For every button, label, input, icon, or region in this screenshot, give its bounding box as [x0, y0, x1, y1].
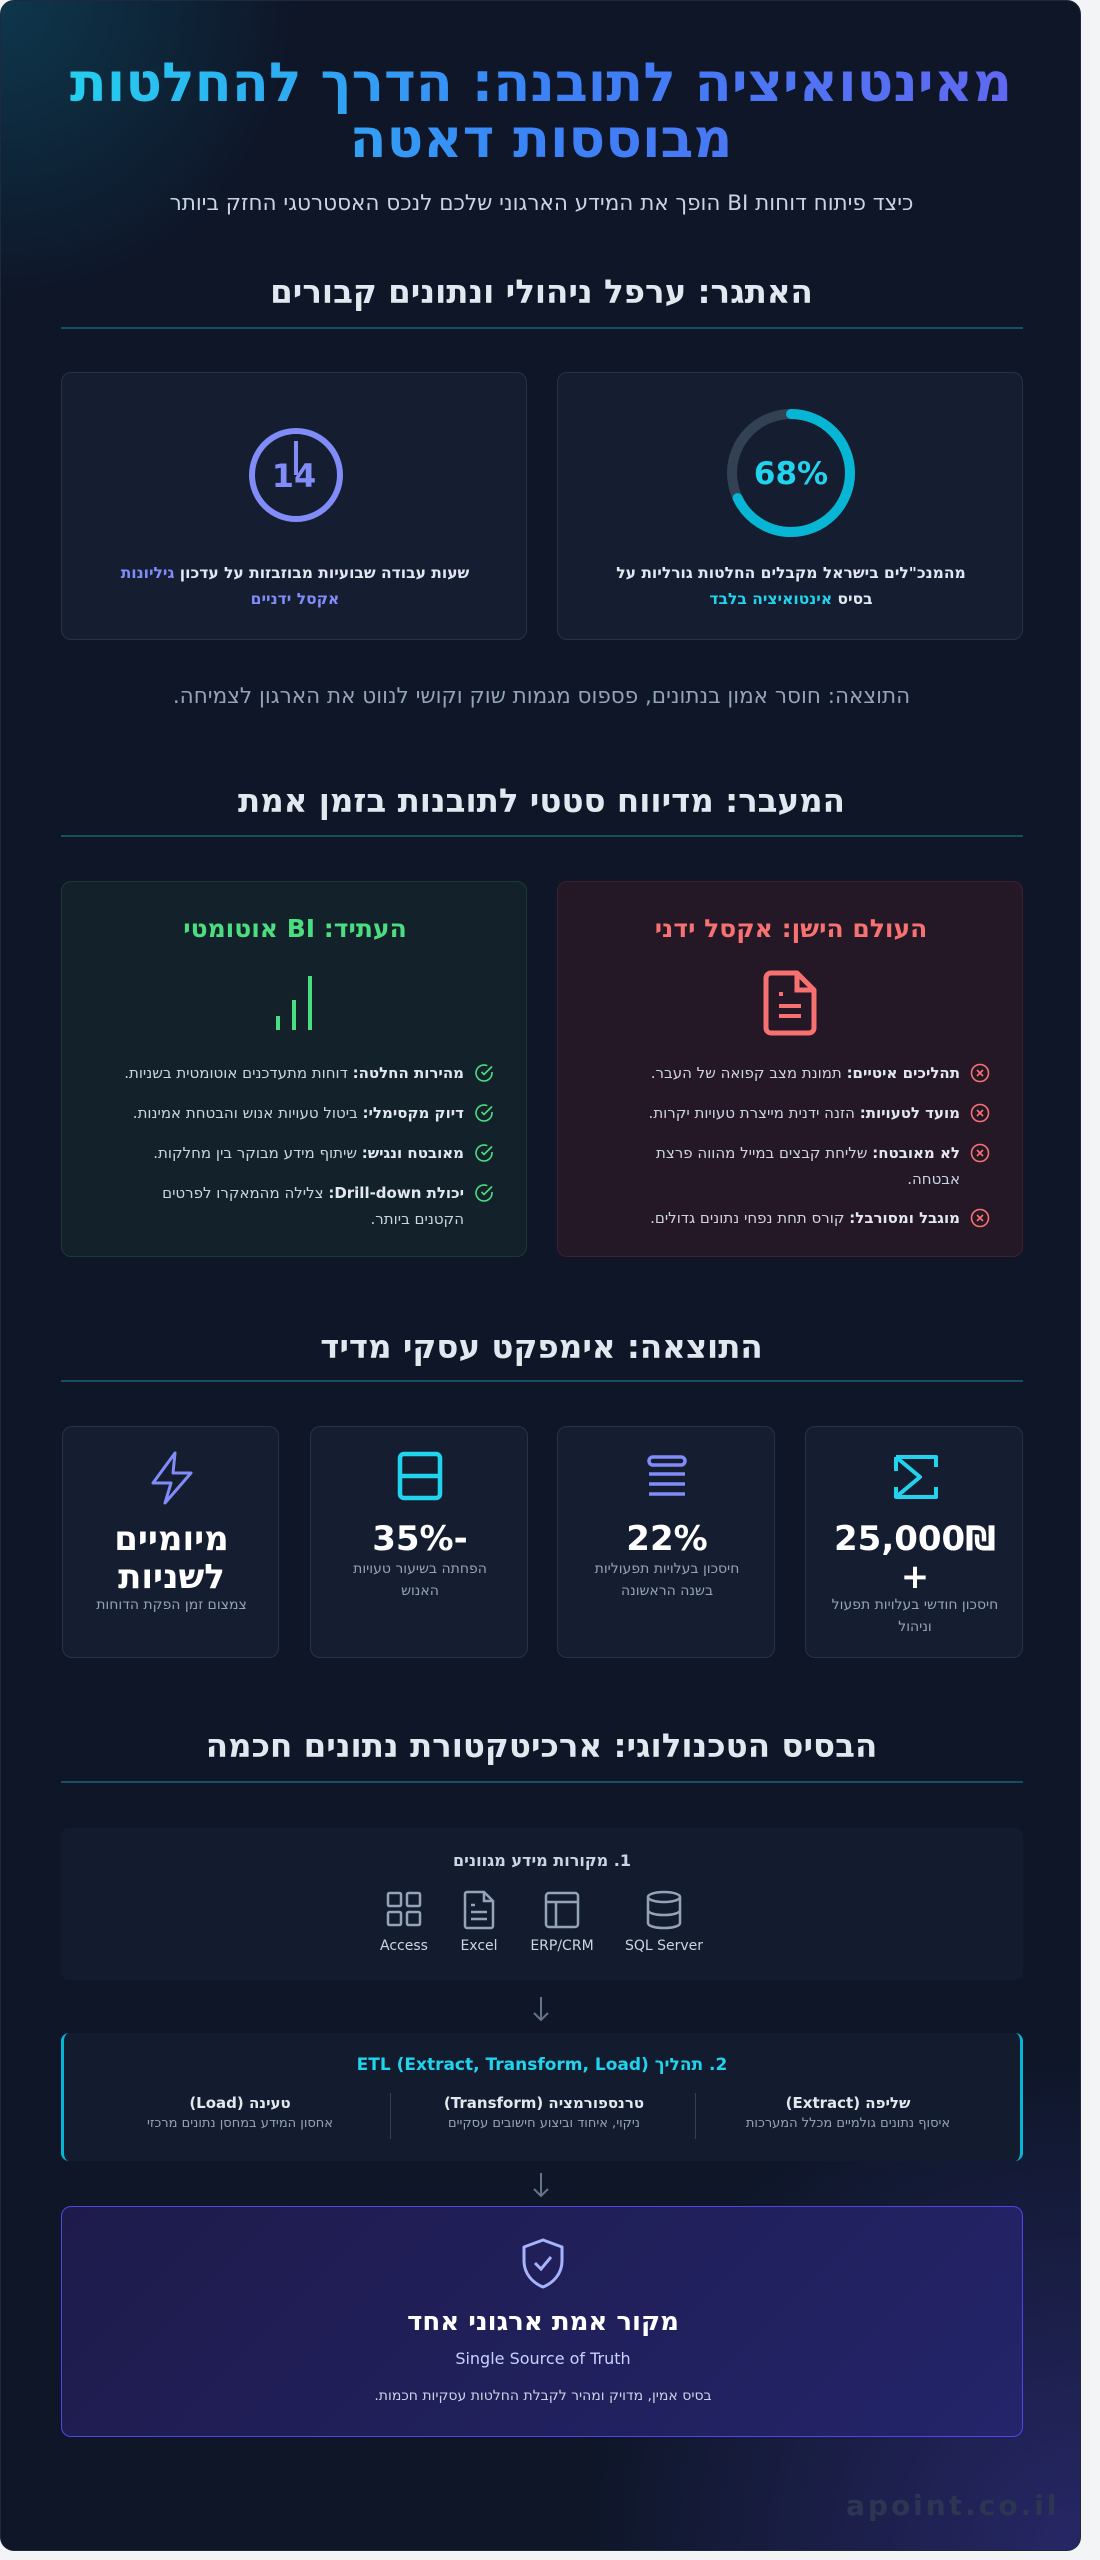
text: 68% description: מהמנכ"לים בישראל מקבלים החלטות גורליות על בסיס אינטואיציה בלבד	[616, 564, 966, 608]
step: extract: איסוף נתונים גולמיים מכלל המערכות	[746, 2116, 950, 2131]
heading: transition: המעבר: מדיווח סטטי לתובנות בזמן אמת	[238, 782, 845, 820]
donut chart 68%: 68%	[754, 456, 828, 492]
panel: future BI	[61, 881, 527, 1257]
step: transform	[444, 2094, 644, 2131]
step: load: אחסון המידע במחסן נתונים מרכזי	[147, 2116, 333, 2131]
icon: split box	[398, 1452, 442, 1500]
step: transform: ניקוי, איחוד וביצוע חישובים עסקיים	[448, 2116, 640, 2131]
title: מאינטואיציה לתובנה: הדרך להחלטות מבוססות דאטה	[70, 51, 1012, 170]
icon: stack	[647, 1455, 687, 1496]
arrow: ETL to truth	[533, 2173, 549, 2198]
heading: impact: התוצאה: אימפקט עסקי מדיד	[320, 1328, 763, 1366]
icon: clock 14	[249, 428, 343, 522]
subtitle: כיצד פיתוח דוחות BI הופך את המידע הארגוני שלכם לנכס האסטרטגי החזק ביותר	[170, 191, 913, 216]
number: -35%	[372, 1519, 468, 1559]
icon: SQL Server	[625, 1890, 703, 1954]
heading: future BI: העתיד: BI אוטומטי	[183, 914, 407, 943]
panel: data sources	[61, 1828, 1023, 1980]
text: 14 hours description: אקסל ידניים	[251, 590, 339, 608]
list: BI benefits: מהירות החלטה: דוחות מתעדכנים אוטומטית בשניות.	[124, 1064, 464, 1082]
icon: document	[764, 970, 816, 1036]
number: לשניות	[118, 1557, 225, 1597]
panel: 14 hours	[61, 372, 527, 640]
step: extract: שליפה (Extract)	[786, 2094, 910, 2112]
number: +	[901, 1557, 929, 1597]
icon: Excel: Excel	[460, 1938, 498, 1954]
list: BI benefits: דיוק מקסימלי: ביטול טעויות אנוש והבטחת אמינות.	[133, 1104, 464, 1122]
list: old world issues: מועד לטעויות: הזנה ידנית מייצרת טעויות יקרות.	[649, 1104, 960, 1122]
text: 14 hours description	[120, 564, 470, 608]
number: 25,000₪	[834, 1519, 996, 1559]
list: old world issues: לא מאובטח: שליחת קבצים במייל מהווה פרצת אבטחה.	[656, 1144, 960, 1188]
list: BI benefits: מאובטח ונגיש: שיתוף מידע מבוקר בין מחלקות.	[153, 1144, 464, 1162]
icon: clock 14: 14	[272, 457, 316, 495]
number	[114, 1519, 229, 1597]
icon: sigma	[894, 1455, 938, 1499]
heading: challenge: האתגר: ערפל ניהולי ונתונים קבורים	[270, 273, 813, 311]
icon: SQL Server: SQL Server	[625, 1938, 703, 1954]
subtitle: Single Source of Truth	[455, 2349, 631, 2368]
list: BI benefits	[124, 1064, 493, 1228]
list: BI benefits: יכולת Drill-down: צלילה מהמאקרו לפרטים הקטנים ביותר.	[162, 1184, 464, 1228]
desc: צמצום זמן הפקת הדוחות	[96, 1597, 247, 1613]
list: old world issues: מוגבל ומסורבל: קורס תחת נפחי נתונים גדולים.	[650, 1209, 960, 1227]
list: old world issues	[649, 1064, 990, 1228]
icon: shield	[522, 2238, 564, 2288]
text: result note: התוצאה: חוסר אמון בנתונים, פספוס מגמות שוק וקושי לנווט את הארגון לצמיחה.	[173, 684, 910, 709]
text: 14 hours description: שעות עבודה שבועיות מבוזבזות על עדכון גיליונות	[121, 564, 469, 582]
heading: sources: 1. מקורות מידע מגוונים	[453, 1851, 631, 1870]
stat card: 22%	[557, 1426, 775, 1658]
number	[834, 1519, 996, 1597]
arrow: sources to ETL	[533, 1997, 549, 2022]
watermark: apoint.co.il	[846, 2489, 1059, 2522]
number: מיומיים	[114, 1519, 229, 1559]
icon: ERP/CRM	[530, 1892, 594, 1954]
stat card: days to seconds	[62, 1426, 279, 1658]
heading: ETL: 2. תהליך ETL (Extract, Transform, Load)	[357, 2055, 727, 2075]
icon: Access: Access	[380, 1938, 428, 1954]
panel: ETL	[61, 2033, 1023, 2161]
heading: architecture: הבסיס הטכנולוגי: ארכיטקטורת נתונים חכמה	[206, 1727, 877, 1765]
step: transform: טרנספורמציה (Transform)	[444, 2094, 644, 2112]
icon: bar chart	[276, 976, 312, 1030]
heading: old world: העולם הישן: אקסל ידני	[655, 914, 927, 943]
number: 22%	[626, 1519, 708, 1559]
step: load	[147, 2094, 333, 2131]
panel: old world	[557, 881, 1023, 1257]
step: extract	[746, 2094, 950, 2131]
stat card: 25,000	[805, 1426, 1023, 1658]
icon: Excel	[460, 1890, 498, 1954]
panel: single source of truth	[61, 2206, 1023, 2437]
list: old world issues: תהליכים איטיים: תמונת מצב קפואה של העבר.	[651, 1064, 960, 1082]
desc: הפחתה בשיעור טעויות האנוש	[353, 1561, 487, 1599]
step: load: טעינה (Load)	[189, 2094, 291, 2112]
desc: חיסכון בעלויות תפעוליות בשנה הראשונה	[595, 1561, 739, 1599]
desc: בסיס אמין, מדויק ומהיר לקבלת החלטות עסקיות חכמות.	[374, 2388, 712, 2404]
heading: truth: מקור אמת ארגוני אחד	[407, 2307, 679, 2337]
icon: Access	[380, 1892, 428, 1954]
donut chart 68%	[727, 409, 855, 537]
stat card: -35%	[310, 1426, 528, 1658]
desc: חיסכון חודשי בעלויות תפעול וניהול	[832, 1597, 998, 1635]
panel: 68% stat	[557, 372, 1023, 640]
icon: lightning	[151, 1452, 193, 1504]
icon: ERP/CRM: ERP/CRM	[530, 1938, 594, 1954]
